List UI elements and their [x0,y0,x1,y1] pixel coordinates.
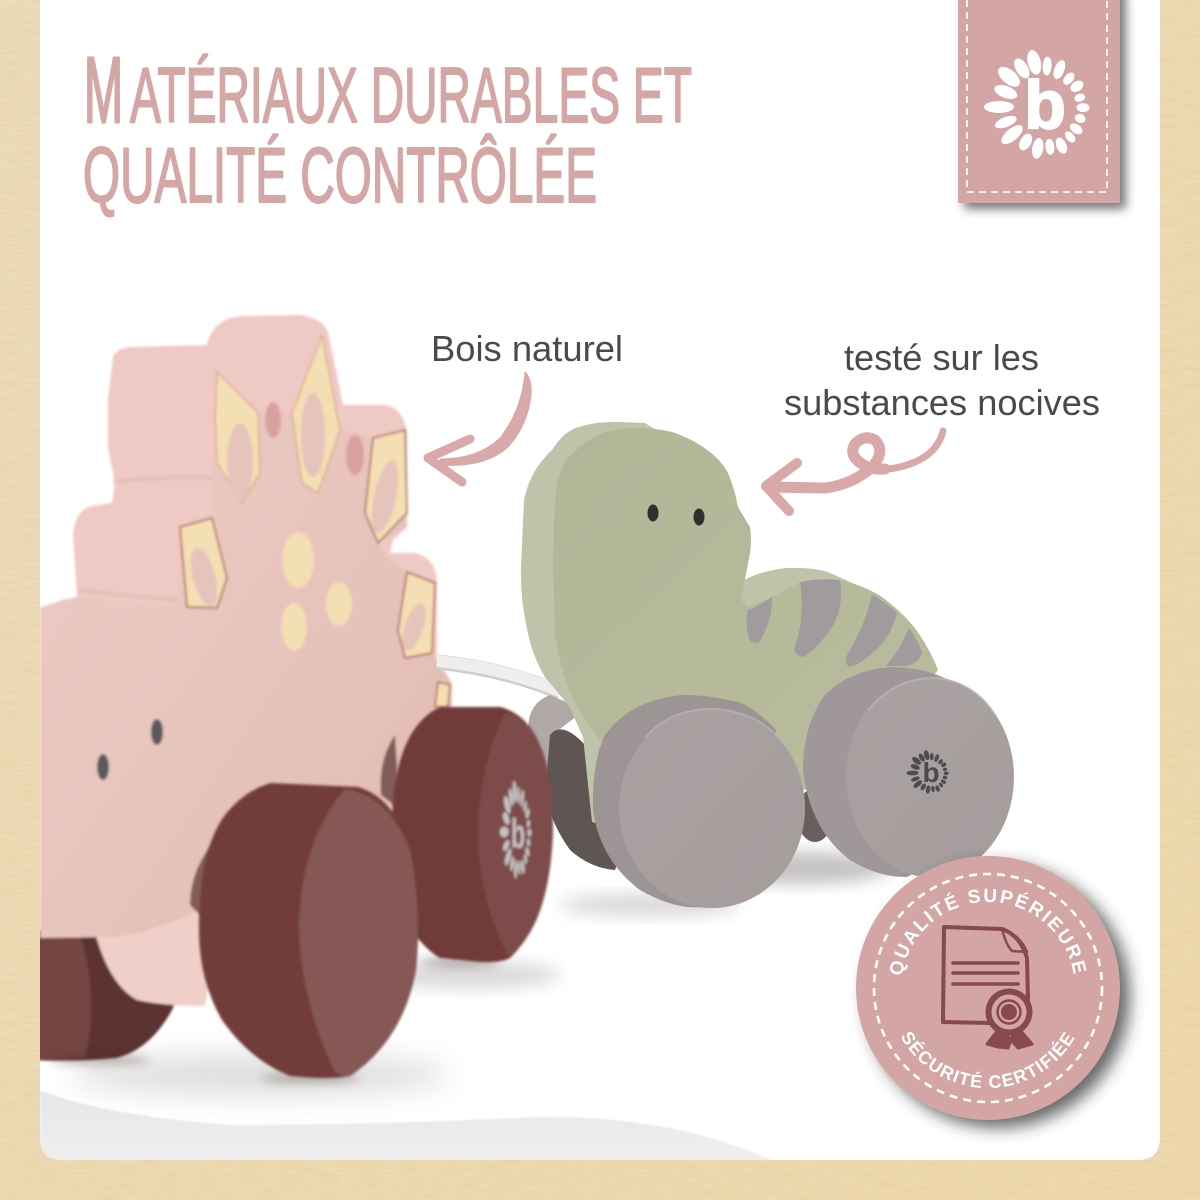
body front face [40,495,450,940]
front-left wheel [593,695,805,908]
stripes [746,579,922,666]
notches [265,402,364,475]
icon: wheel logo [907,750,949,794]
title: QUALITÉ CONTRÔLÉE [83,131,597,219]
eyes [648,504,704,526]
rope [437,661,560,692]
eyes [97,719,163,780]
cream spots [281,532,352,651]
belly and leg [94,912,208,1008]
title: ATÉRIAUX DURABLES ET [130,51,692,139]
plate inner shapes [186,393,430,654]
arrow: teste [766,431,943,511]
badge text top: QUALITÉ SUPÉRIEURE [890,888,1086,974]
icon: brand logo [984,49,1090,160]
label: teste sur les substances nocives: substances nocives [784,382,1100,423]
extrusion shading [78,478,212,600]
body side extrusion [40,315,452,800]
axle shadows [190,735,400,920]
floor reflection [40,852,890,1165]
brand tag [958,0,1126,209]
icon: wheel logo: b [922,757,940,788]
red wheels [199,707,553,1078]
rear red wheel [392,707,553,962]
icon: wheel logo white: b [511,811,525,858]
back left wheel [30,930,176,1061]
back plates [180,335,450,707]
side extrusion [521,422,680,830]
rear wheel [528,695,640,870]
icon: brand logo: b [1024,67,1066,143]
front-right wheel [803,667,1014,877]
front red wheel [199,783,418,1078]
quality badge [854,852,1142,1140]
far right hidden wheel [797,788,833,842]
arrow: bois naturel [428,372,531,482]
title [83,38,692,219]
title: M [84,38,123,142]
pink dinosaur toy [30,315,452,1061]
green dinosaur toy [521,422,1014,908]
icon: wheel logo white [500,779,531,879]
icon: certificate [943,927,1032,1048]
label: teste sur les substances nocives [784,337,1100,423]
label: bois naturel: Bois naturel [431,328,623,369]
badge text bottom: SÉCURITÉ CERTIFIÉE [902,1032,1075,1088]
front face [553,428,938,790]
label: teste sur les substances nocives: testé sur les [844,337,1039,378]
floor shadows [50,958,500,1082]
